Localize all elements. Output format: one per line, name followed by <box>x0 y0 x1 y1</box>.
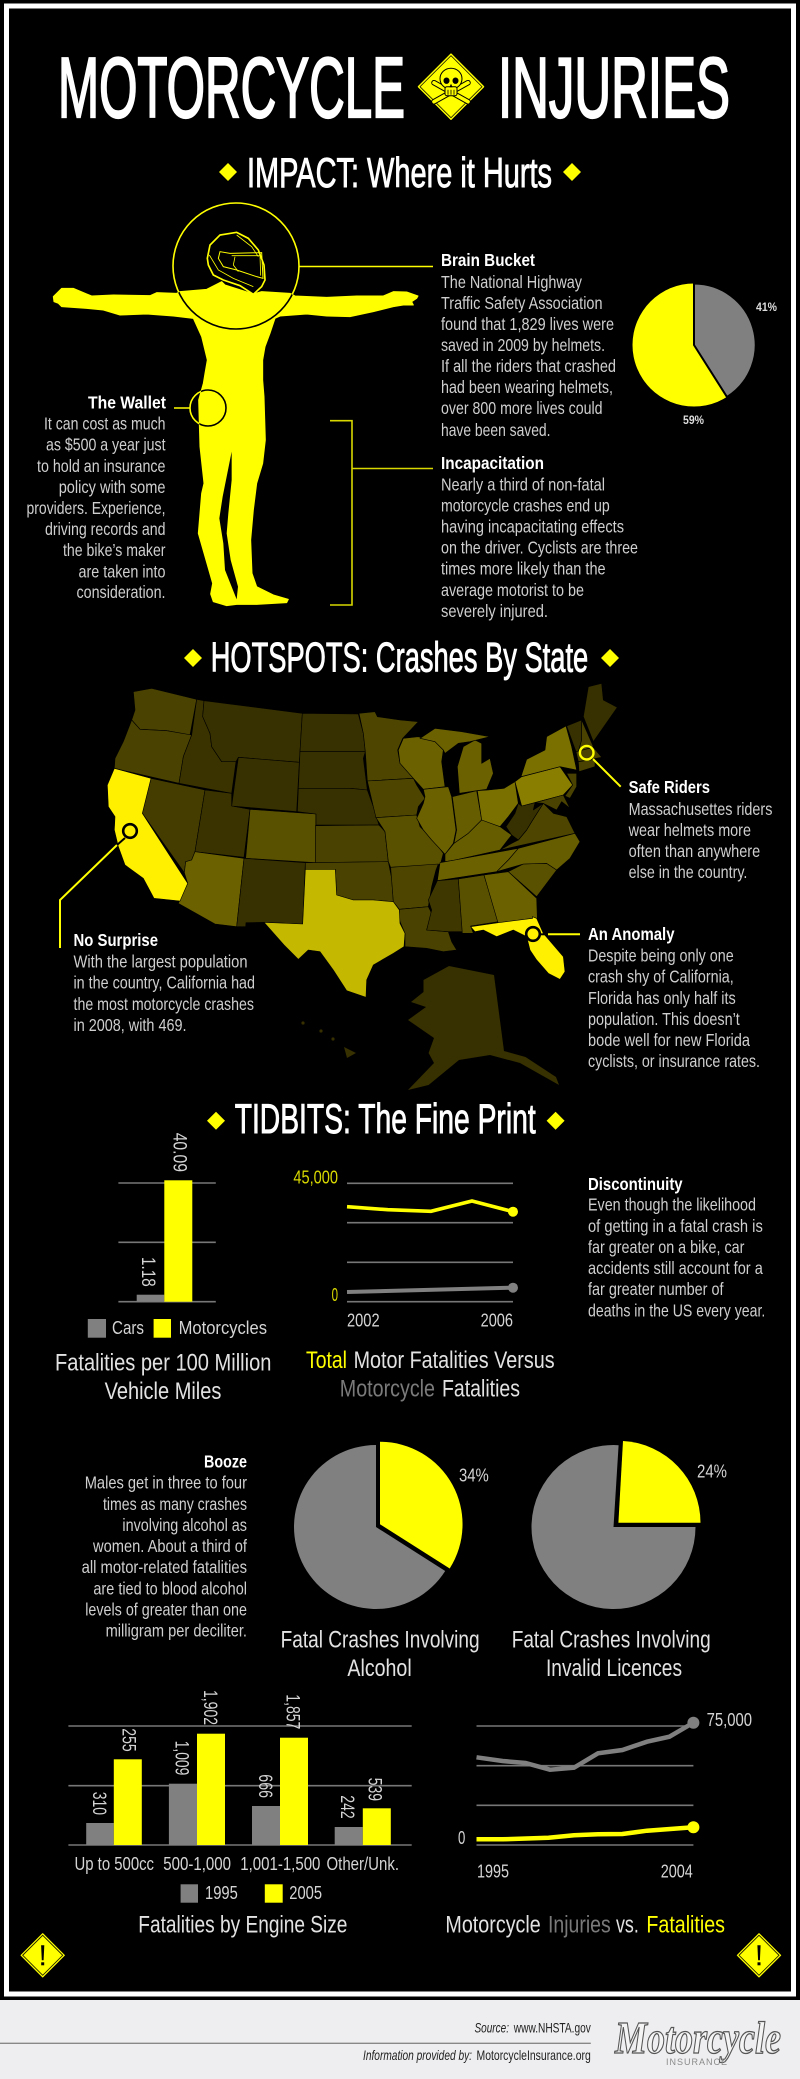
text: an anomaly: Despite being only one <box>588 946 734 966</box>
bar chart: fatalities by engine size: 310 <box>88 1792 109 1815</box>
bar chart: fatalities per 100 million vehicle miles: 40.09 <box>168 1133 190 1172</box>
line chart: injuries vs fatalities: 75,000 <box>707 1710 752 1730</box>
text: brain bucket: over 800 more lives could <box>441 398 602 418</box>
text: incapacitation: times more likely than the <box>441 558 606 578</box>
pie chart: alcohol: Fatal Crashes Involving <box>281 1626 480 1653</box>
text: the wallet: as $500 a year just <box>46 435 166 455</box>
bar chart: fatalities per 100 million vehicle miles: 1.18 <box>137 1257 158 1287</box>
text: booze: times as many crashes <box>103 1494 247 1514</box>
text: the wallet: policy with some <box>59 477 166 497</box>
text: brain bucket: Traffic Safety Association <box>441 293 602 313</box>
text: safe riders: Safe Riders <box>629 777 710 797</box>
footer: Source: <box>474 2020 509 2036</box>
text: discontinuity: accidents still account for a <box>588 1258 763 1278</box>
heading: hotspots <box>184 634 619 681</box>
text: the wallet: It can cost as much <box>44 414 166 434</box>
callout marker: california <box>60 824 137 948</box>
text: the wallet: the bike’s maker <box>63 540 166 560</box>
text: booze: are tied to blood alcohol <box>93 1578 247 1598</box>
text: an anomaly: bode well for new Florida <box>588 1030 750 1050</box>
text: booze: Booze <box>204 1451 247 1471</box>
text: booze: levels of greater than one <box>85 1600 247 1620</box>
bar chart: fatalities by engine size: 242 <box>336 1795 357 1819</box>
text: incapacitation: Incapacitation <box>441 453 544 473</box>
text: incapacitation: motorcycle crashes end up <box>441 496 610 516</box>
text: booze <box>82 1451 247 1641</box>
bar chart: fatalities by engine size: 1995 <box>205 1883 238 1903</box>
text: brain bucket: The National Highway <box>441 272 582 292</box>
map: crashes by state <box>107 683 617 1090</box>
line chart: total vs motorcycle fatalities: Fatalities <box>442 1376 520 1403</box>
text: booze: milligram per deciliter. <box>106 1621 247 1641</box>
bar chart: fatalities by engine size: 666 <box>254 1774 275 1798</box>
text: the wallet <box>26 392 166 602</box>
line chart: total vs motorcycle fatalities: Motorcycle <box>340 1376 435 1403</box>
bar chart: fatalities by engine size: 1,857 <box>282 1694 303 1729</box>
bar chart: fatalities by engine size: Fatalities by Engine Size <box>138 1912 347 1939</box>
text: discontinuity <box>588 1174 765 1321</box>
text: an anomaly: An Anomaly <box>588 924 675 944</box>
icon: skull warning diamond <box>418 54 484 119</box>
text: booze: all motor-related fatalities <box>82 1557 247 1577</box>
text: brain bucket: have been saved. <box>441 420 550 440</box>
pie chart: helmets: 59% <box>683 413 704 427</box>
bar chart: fatalities per 100 million vehicle miles: Fatalities per 100 Million <box>55 1350 271 1377</box>
text: incapacitation: on the driver. Cyclists are three <box>441 538 638 558</box>
text: no surprise: With the largest population <box>74 952 248 972</box>
heading: tidbits <box>207 1095 565 1142</box>
state: florida <box>471 917 565 979</box>
state: alaska <box>408 966 559 1090</box>
text: booze: Males get in three to four <box>85 1473 247 1493</box>
state: texas <box>264 869 405 997</box>
bar chart: fatalities by engine size: Other/Unk. <box>326 1854 399 1874</box>
text: safe riders <box>628 777 773 882</box>
footer: MotorcycleInsurance.org <box>476 2047 591 2063</box>
text: the wallet: consideration. <box>76 582 166 602</box>
text: brain bucket <box>441 250 616 440</box>
connector lines <box>174 266 433 605</box>
line chart: total vs motorcycle fatalities: Motor Fatalities Versus <box>354 1347 555 1374</box>
text: discontinuity: Even though the likelihood <box>588 1195 756 1215</box>
heading: hotspots: HOTSPOTS: Crashes By State <box>211 634 588 681</box>
footer <box>0 2000 800 2079</box>
line chart: total vs motorcycle fatalities: Total <box>306 1347 347 1374</box>
text: brain bucket: Brain Bucket <box>441 250 535 270</box>
text: the wallet: are taken into <box>78 562 166 582</box>
text: an anomaly: crash shy of California, <box>588 967 734 987</box>
text: incapacitation <box>441 453 638 621</box>
text: discontinuity: of getting in a fatal crash is <box>588 1216 763 1236</box>
text: no surprise: in the country, California had <box>74 973 255 993</box>
heading: impact: IMPACT: Where it Hurts <box>247 149 552 196</box>
text: incapacitation: having incapacitating effects <box>441 516 624 536</box>
body figure <box>53 203 418 606</box>
text: incapacitation: average motorist to be <box>441 580 584 600</box>
footer: www.NHSTA.gov <box>513 2020 591 2036</box>
text: an anomaly <box>588 924 760 1071</box>
text: the wallet: The Wallet <box>88 392 166 412</box>
text: safe riders: else in the country. <box>629 862 747 882</box>
state: hawaii <box>301 1021 356 1058</box>
text: discontinuity: Discontinuity <box>588 1174 683 1194</box>
line chart: total vs motorcycle fatalities: 2002 <box>347 1311 380 1331</box>
line chart: total vs motorcycle fatalities: 2006 <box>481 1311 513 1331</box>
bar chart: fatalities by engine size: 1,902 <box>199 1690 220 1725</box>
line chart: injuries vs fatalities: Motorcycle <box>445 1912 541 1939</box>
bar chart: fatalities by engine size: 500-1,000 <box>163 1854 231 1874</box>
text: booze: women. About a third of <box>92 1536 247 1556</box>
bar chart: fatalities per 100 million vehicle miles: Cars <box>112 1318 144 1338</box>
pie chart: alcohol: Alcohol <box>347 1655 412 1682</box>
icon: helmet <box>207 232 265 294</box>
bar chart: fatalities by engine size: 1,001-1,500 <box>240 1854 320 1874</box>
text: the wallet: providers. Experience, <box>26 498 166 518</box>
bar chart: fatalities by engine size: 255 <box>117 1728 138 1752</box>
bar chart: fatalities by engine size: 2005 <box>289 1883 322 1903</box>
line chart: injuries vs fatalities: Fatalities <box>646 1912 725 1939</box>
pie chart: invalid licences <box>512 1441 727 1682</box>
icon: warning diamond right <box>737 1934 781 1977</box>
bar chart: fatalities per 100 million vehicle miles: Motorcycles <box>179 1318 267 1338</box>
bar chart: fatalities by engine size <box>68 1690 412 1939</box>
heading: tidbits: TIDBITS: The Fine Print <box>235 1095 536 1142</box>
line chart: injuries vs fatalities: 1995 <box>477 1861 509 1881</box>
line chart: injuries vs fatalities: 2004 <box>661 1861 693 1881</box>
line chart: injuries vs fatalities <box>445 1710 752 1939</box>
text: no surprise: in 2008, with 469. <box>74 1015 186 1035</box>
text: incapacitation: Nearly a third of non-fatal <box>441 474 605 494</box>
text: booze: involving alcohol as <box>122 1515 247 1535</box>
title: MOTORCYCLE <box>58 41 405 136</box>
text: incapacitation: severely injured. <box>441 601 548 621</box>
text: safe riders: Massachusettes riders <box>629 799 773 819</box>
bar chart: fatalities per 100 million vehicle miles: Vehicle Miles <box>105 1378 221 1405</box>
text: the wallet: driving records and <box>45 519 166 539</box>
line chart: total vs motorcycle fatalities <box>293 1167 555 1403</box>
text: discontinuity: far greater number of <box>588 1279 724 1299</box>
text: no surprise <box>74 930 255 1035</box>
text: an anomaly: Florida has only half its <box>588 988 736 1008</box>
bar chart: fatalities per 100 million vehicle miles <box>55 1133 271 1405</box>
pie chart: invalid licences: Invalid Licences <box>546 1655 682 1682</box>
text: safe riders: wear helmets more <box>628 820 751 840</box>
text: brain bucket: saved in 2009 by helmets. <box>441 335 605 355</box>
pie chart: alcohol <box>281 1442 489 1682</box>
bar chart: fatalities by engine size: Up to 500cc <box>74 1854 154 1874</box>
text: brain bucket: If all the riders that crashed <box>441 356 616 376</box>
line chart: injuries vs fatalities: vs. <box>616 1912 639 1939</box>
text: the wallet: to hold an insurance <box>37 456 166 476</box>
callout marker: massachusetts <box>580 746 621 787</box>
line chart: total vs motorcycle fatalities: 0 <box>332 1285 338 1305</box>
state: california <box>107 768 188 901</box>
pie chart: invalid licences: Fatal Crashes Involving <box>512 1626 711 1653</box>
text: an anomaly: cyclists, or insurance rates. <box>588 1051 760 1071</box>
bar chart: fatalities by engine size: 1,009 <box>170 1741 192 1775</box>
pie chart: alcohol: 34% <box>459 1466 489 1486</box>
callout marker: florida <box>526 927 580 941</box>
bar chart: fatalities by engine size: 539 <box>363 1778 384 1801</box>
text: discontinuity: far greater on a bike, car <box>588 1237 745 1257</box>
footer: Information provided by: <box>363 2047 472 2063</box>
line chart: injuries vs fatalities: 0 <box>458 1828 465 1848</box>
icon: warning diamond left <box>21 1934 64 1977</box>
text: an anomaly: population. This doesn’t <box>588 1009 740 1029</box>
pie chart: helmets <box>632 283 777 427</box>
line chart: injuries vs fatalities: Injuries <box>548 1912 611 1939</box>
pie chart: helmets: 41% <box>756 300 777 314</box>
pie chart: invalid licences: 24% <box>697 1462 727 1482</box>
text: brain bucket: found that 1,829 lives were <box>441 314 614 334</box>
line chart: total vs motorcycle fatalities: 45,000 <box>293 1167 338 1187</box>
text: no surprise: the most motorcycle crashes <box>74 994 254 1014</box>
text: safe riders: often than anywhere <box>629 841 760 861</box>
text: brain bucket: had been wearing helmets, <box>441 377 613 397</box>
logo: motorcycle insurance: INSURANCE <box>666 2057 727 2067</box>
text: no surprise: No Surprise <box>74 930 158 950</box>
